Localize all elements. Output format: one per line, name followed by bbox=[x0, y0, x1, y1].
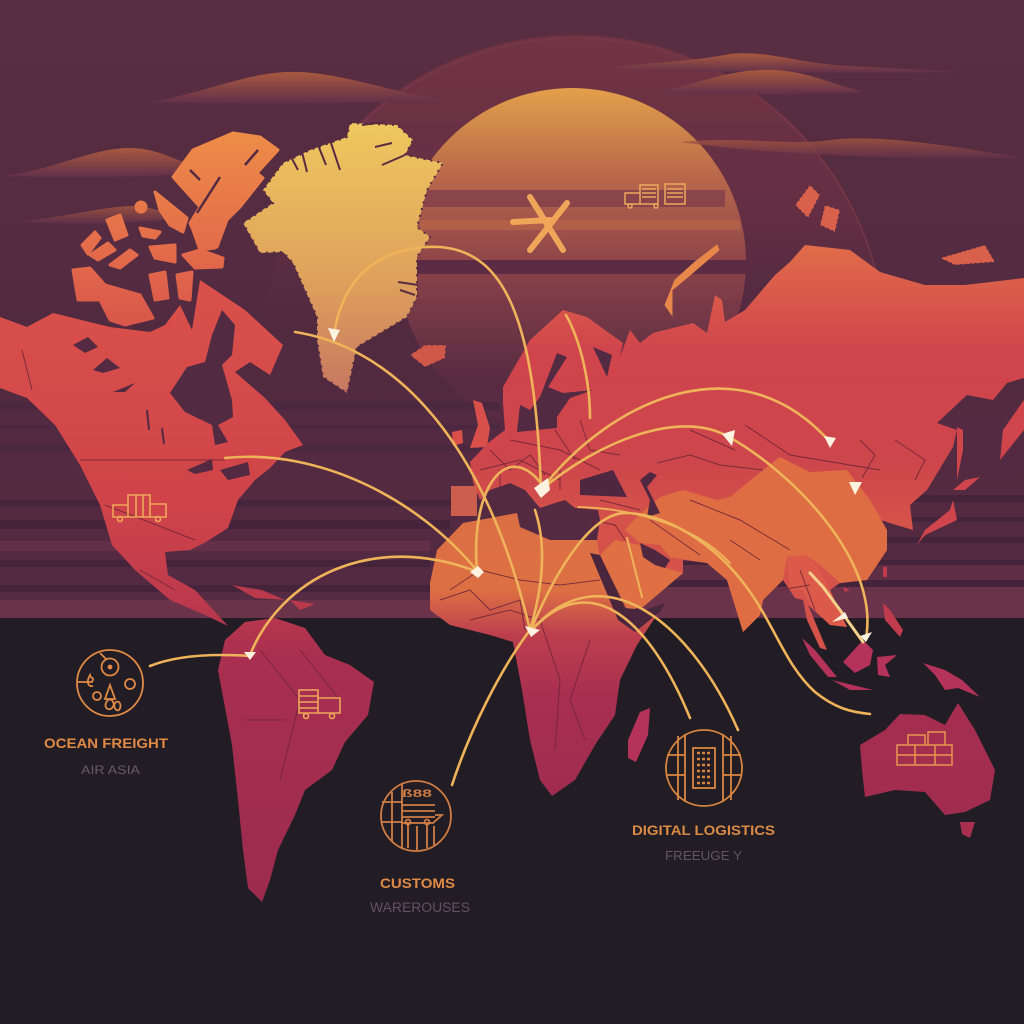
halo rings around the sun bbox=[265, 35, 885, 655]
background: dusk sky bbox=[0, 0, 1024, 620]
region: Central Asia, India and China bbox=[625, 457, 887, 632]
route: South America to West Africa bbox=[250, 557, 478, 655]
landmass: Arctic Canada islands bbox=[73, 133, 278, 325]
label: Customs: CUSTOMS bbox=[380, 876, 455, 891]
water: Black Sea bbox=[580, 470, 627, 497]
landmass: Novaya Zemlya bbox=[665, 245, 719, 315]
country borders bbox=[22, 350, 925, 780]
icon: customs dial bbox=[381, 781, 451, 851]
landmass: Svalbard and arctic isles bbox=[795, 185, 995, 265]
landmass: Indonesia and New Guinea bbox=[802, 638, 980, 697]
landmass: Japan and Kamchatka bbox=[917, 400, 1024, 545]
panel: Customs bbox=[370, 781, 470, 915]
landmass: North America bbox=[0, 280, 303, 626]
route: Customs link bbox=[452, 467, 542, 785]
icon: digital logistics dial bbox=[666, 730, 742, 806]
label: Digital Logistics: DIGITAL LOGISTICS bbox=[632, 823, 775, 838]
route arrowheads bbox=[244, 328, 872, 660]
water: Canadian and Great Lakes bbox=[73, 337, 250, 480]
landmass: British Isles bbox=[452, 400, 490, 448]
sun bbox=[398, 88, 746, 436]
landmass: Philippines and Taiwan bbox=[843, 567, 903, 637]
route: North America to West Africa bbox=[225, 457, 478, 572]
water: Red Sea and Gulf of Aden bbox=[590, 553, 665, 632]
sky stripes bbox=[0, 190, 1024, 618]
landmass: Eurasia bbox=[470, 245, 1024, 650]
water: Hudson Bay bbox=[170, 310, 235, 445]
icon: sky trucks bbox=[625, 184, 685, 208]
water: White Sea and Baltic bbox=[517, 347, 612, 432]
water: Ellesmere channels bbox=[190, 150, 258, 213]
route: Africa to Southeast Asia bbox=[530, 513, 870, 714]
landmass: South America bbox=[218, 618, 374, 902]
landmass: Madagascar bbox=[628, 708, 650, 762]
route: Greenland arc bbox=[334, 247, 541, 490]
landmass: Caribbean islands bbox=[232, 585, 315, 610]
landmass: Iceland bbox=[410, 345, 446, 367]
label: Warerouses: WAREROUSES bbox=[370, 900, 470, 915]
route: Ocean Freight link bbox=[150, 655, 250, 666]
landmass: Australia bbox=[860, 703, 995, 815]
route: Canada to Africa bbox=[295, 332, 530, 630]
water: Persian Gulf bbox=[640, 543, 670, 568]
water: Caspian Sea bbox=[640, 472, 660, 517]
landmass: Africa bbox=[430, 513, 660, 796]
landmass: Tasmania bbox=[960, 822, 975, 838]
region: Arabia bbox=[600, 540, 683, 610]
icon: Australia warehouse bbox=[897, 732, 952, 765]
text: icon glyphs: ß88 bbox=[402, 788, 432, 800]
route: Scandinavia bbox=[566, 315, 590, 418]
label: Air Asia: AIR ASIA bbox=[81, 763, 140, 777]
icon: North America truck bbox=[113, 495, 166, 522]
route arcs bbox=[150, 247, 870, 785]
Europe inset square bbox=[451, 486, 477, 516]
panel: Digital Logistics bbox=[632, 730, 775, 863]
clouds bbox=[0, 53, 1024, 223]
label: Freeuge Y: FREEUGE Y bbox=[665, 849, 743, 863]
background: dark lower band bbox=[0, 618, 1024, 1024]
map: landmasses bbox=[0, 122, 1024, 902]
route: Europe to Siberia bbox=[541, 389, 830, 490]
icon: South America truck bbox=[299, 690, 340, 718]
region: Southeast Asia bbox=[787, 555, 847, 627]
route: Digital Logistics link bbox=[530, 603, 690, 718]
route: Europe to Russia far east bbox=[541, 426, 867, 638]
label: Ocean Freight: OCEAN FREIGHT bbox=[44, 736, 169, 751]
water: Greenland fjords bbox=[290, 122, 418, 295]
landmass: Greenland bbox=[243, 123, 443, 393]
icon: sky star mark bbox=[513, 197, 567, 250]
panel: Ocean Freight bbox=[44, 650, 169, 777]
icon: ocean freight dial bbox=[77, 650, 143, 716]
